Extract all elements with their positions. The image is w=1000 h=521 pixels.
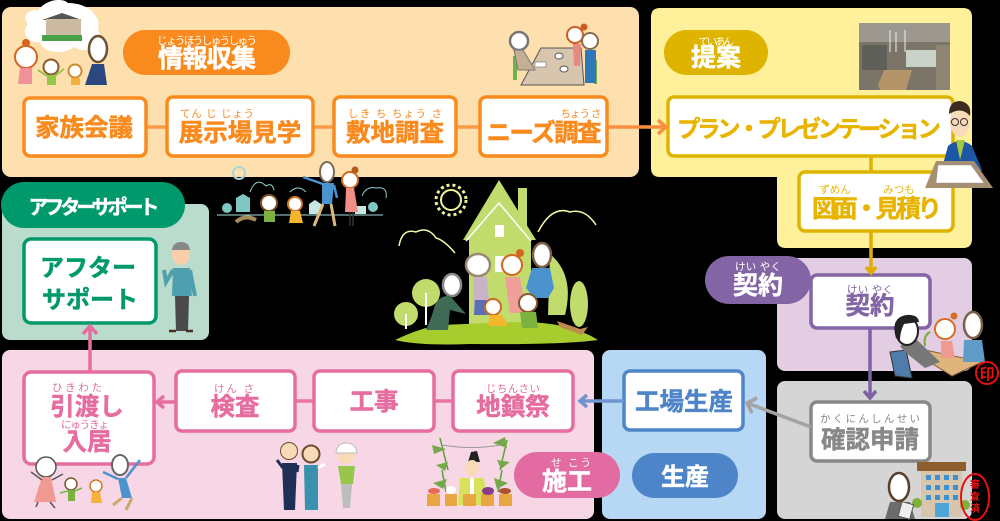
arrow: 契約 to 確認申請: [864, 328, 876, 398]
step: アフターサポート: [24, 239, 156, 323]
step: 工事: 工事: [350, 388, 398, 416]
arrow: 検査 to 引渡し: [157, 396, 175, 408]
panel: 確認申請: [777, 381, 989, 520]
step: 図面・見積り: ずめん: [819, 184, 851, 196]
step: 展示場見学: [167, 97, 313, 156]
heading pill: 施工: 施工: [542, 468, 592, 496]
heading pill: アフターサポート: [1, 182, 185, 228]
step: プラン・プレゼンテーション: プラン・プレゼンテーション: [677, 115, 941, 142]
illustration: contract signing: [890, 312, 998, 384]
illustration: house with multi-generation family: [394, 180, 598, 344]
illustration: jumping family: [31, 455, 140, 510]
step: 家族会議: 家族会議: [35, 114, 133, 142]
step: 展示場見学: 展示場見学: [179, 119, 301, 147]
step: ニーズ調査: ちょう さ: [560, 108, 602, 120]
connector lines: [146, 125, 479, 129]
heading pill: 情報収集: [123, 30, 290, 75]
heading pill: 施工: せ こう: [551, 457, 591, 469]
heading pill: 生産: [632, 453, 738, 498]
stamp: 印: 印: [979, 366, 995, 383]
stamp: 審査済: 査: [970, 490, 980, 503]
step: 地鎮祭: [453, 371, 573, 431]
step: 引渡し入居: にゅうきょ: [61, 419, 109, 431]
step: 工場生産: 工場生産: [635, 388, 733, 416]
heading pill: 提案: ていあん: [698, 36, 734, 48]
heading pill: 施工: [514, 452, 620, 498]
illustration: walking family: [217, 162, 386, 226]
step: ニーズ調査: ニーズ調査: [486, 118, 602, 147]
step: 引渡し入居: 引渡し: [50, 393, 124, 421]
arrow: 工場生産 to 地鎮祭: [580, 395, 624, 407]
illustration: inspector and building: [885, 462, 989, 520]
stamp: 審査済: 審: [970, 478, 980, 491]
heading pill: 提案: [664, 30, 768, 75]
panel: 契約: [705, 256, 998, 384]
step: 確認申請: かくにんしんせい: [820, 413, 920, 425]
panel: アフターサポート: [1, 182, 209, 340]
connector lines: [295, 399, 453, 403]
step: 引渡し入居: [24, 372, 154, 464]
panel: 情報収集: [2, 0, 639, 177]
step: 敷地調査: しき ち ちょう さ: [348, 108, 442, 120]
connector: [869, 156, 873, 171]
step: 地鎮祭: じちんさい: [486, 383, 540, 395]
step: 図面・見積り: みつも: [883, 184, 915, 196]
step: 敷地調査: [334, 97, 456, 156]
step: 図面・見積り: [799, 172, 953, 231]
step: 引渡し入居: 入居: [62, 429, 112, 456]
stamp: 審査済: 済: [970, 502, 980, 515]
stamp: 審査済: [961, 474, 989, 520]
step: アフターサポート: アフター: [40, 255, 136, 282]
illustration: construction workers: [277, 442, 357, 510]
step: アフターサポート: サポート: [42, 287, 138, 314]
arrow: 情報収集 to 提案: [608, 120, 666, 134]
heading pill: 情報収集: 情報収集: [158, 45, 256, 73]
step: 検査: 検査: [210, 393, 260, 421]
arrow: 確認申請 to 工場生産: [747, 398, 811, 427]
step: 展示場見学: てん じ じょう: [180, 108, 254, 120]
heading pill: 契約: 契約: [733, 272, 783, 300]
heading pill: アフターサポート: アフターサポート: [28, 196, 160, 219]
heading pill: 提案: 提案: [691, 44, 741, 72]
illustration: support staff: [164, 242, 195, 331]
photo: interior: [859, 23, 950, 90]
step: 確認申請: 確認申請: [821, 426, 919, 454]
panel: 施工: [2, 350, 620, 519]
heading pill: 契約: けい やく: [735, 261, 781, 273]
heading pill: 情報収集: じょうほうしゅうしゅう: [157, 35, 257, 47]
step: 家族会議: [24, 98, 146, 156]
illustration: designer at desk: [925, 101, 993, 188]
step: プラン・プレゼンテーション: [668, 97, 953, 156]
step: 図面・見積り: 図面・見積り: [812, 195, 942, 223]
panel: 提案: [651, 8, 993, 248]
heading pill: 生産: 生産: [661, 464, 709, 491]
step: 工事: [314, 371, 434, 431]
illustration: meeting at table: [510, 24, 598, 85]
heading pill: 契約: [705, 256, 811, 304]
step: 工場生産: [624, 371, 743, 430]
illustration: family dreaming of house: [15, 0, 107, 85]
arrow: 図面 to 契約: [866, 232, 876, 273]
step: 検査: [176, 371, 295, 431]
step: 確認申請: [811, 402, 930, 461]
step: 敷地調査: 敷地調査: [346, 118, 444, 147]
step: 契約: [811, 275, 930, 328]
step: 契約: けい やく: [847, 284, 893, 296]
step: 地鎮祭: 地鎮祭: [476, 393, 550, 421]
step: 引渡し入居: ひきわた: [52, 382, 102, 394]
illustration: jichinsai priest: [427, 437, 512, 506]
step: 契約: 契約: [846, 292, 894, 320]
panel: 生産: [602, 350, 766, 519]
step: 検査: けん さ: [214, 383, 254, 395]
arrow: 引渡し to アフターサポート: [83, 326, 97, 371]
step: ニーズ調査: [480, 97, 607, 156]
